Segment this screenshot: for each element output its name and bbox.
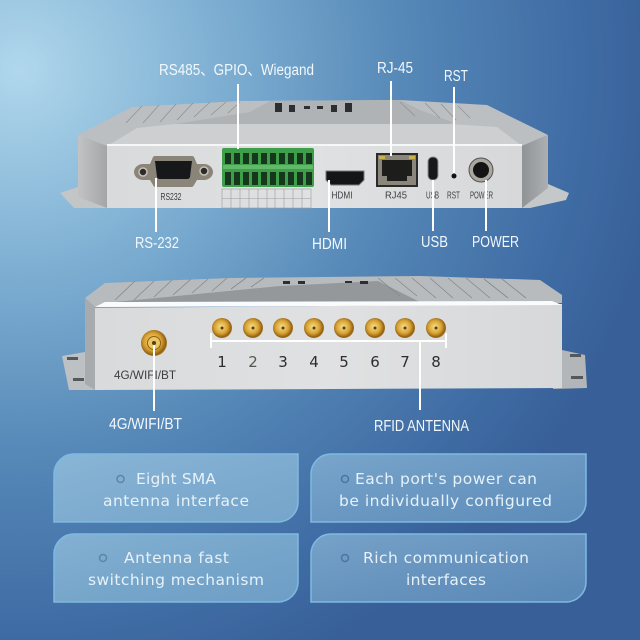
- label: USB: USB: [421, 234, 448, 251]
- antenna numbers: 1: [217, 353, 227, 371]
- antenna numbers: [217, 353, 441, 371]
- port: RJ45: [376, 153, 418, 202]
- card: port power: be individually configured: [339, 492, 552, 510]
- left side panel: [85, 298, 95, 390]
- port: RJ45: RJ45: [385, 190, 407, 202]
- face label: 4G/WIFI/BT: 4G/WIFI/BT: [114, 368, 177, 382]
- antenna numbers: 4: [309, 353, 319, 371]
- antenna connectors 1 to 8: [212, 318, 446, 338]
- label: RFID ANTENNA: RFID ANTENNA: [374, 418, 470, 435]
- device top surface: [85, 276, 562, 307]
- card: fast switching: switching mechanism: [88, 571, 264, 589]
- port: HDMI: [326, 171, 364, 202]
- card: port power: Each port's power can: [355, 470, 537, 488]
- antenna numbers: 3: [278, 353, 288, 371]
- port: USB-C: [426, 157, 439, 202]
- front face: [95, 304, 562, 390]
- port: power jack: POWER: [470, 190, 493, 202]
- left side panel: [78, 135, 107, 208]
- card: rich interfaces: interfaces: [406, 571, 486, 589]
- card: eight SMA: [54, 454, 298, 523]
- port: power jack: [469, 158, 493, 202]
- antenna numbers: 5: [339, 353, 349, 371]
- card: eight SMA: Eight SMA: [136, 470, 216, 488]
- device: top view of port side: [60, 100, 569, 208]
- label: HDMI: HDMI: [312, 236, 347, 253]
- vents: [275, 103, 352, 112]
- pin table: [222, 189, 311, 208]
- card: rich interfaces: Rich communication: [363, 549, 529, 567]
- label: POWER: POWER: [472, 234, 519, 251]
- antenna numbers: 7: [400, 353, 410, 371]
- flanges: [60, 184, 569, 208]
- front face: [107, 146, 522, 208]
- antenna numbers: 8: [431, 353, 441, 371]
- card: rich interfaces: [311, 534, 586, 603]
- card: fast switching: Antenna fast: [124, 549, 229, 567]
- label: 4G/WIFI/BT: 4G/WIFI/BT: [109, 416, 182, 433]
- label: RJ-45: RJ-45: [377, 60, 413, 77]
- label: RS485, GPIO, Wiegand: RS485、GPIO、Wiegand: [159, 62, 314, 79]
- device top surface: [78, 100, 548, 146]
- flanges: [62, 350, 587, 390]
- card: port power: [311, 454, 586, 523]
- right side panel: [522, 135, 548, 208]
- antenna numbers: 2: [248, 353, 258, 371]
- label: RST: RST: [444, 68, 468, 85]
- port: RST pinhole: RST: [447, 190, 460, 202]
- port: RS232 connector: [134, 156, 213, 203]
- port: USB-C: USB: [426, 190, 439, 202]
- card: fast switching: [54, 534, 298, 603]
- card: eight SMA: antenna interface: [103, 492, 249, 510]
- callout lines: [154, 81, 486, 411]
- label: RS-232: RS-232: [135, 235, 179, 252]
- antenna numbers: 6: [370, 353, 380, 371]
- port: RST pinhole: [447, 174, 460, 202]
- SMA connector: 4G: [141, 330, 167, 356]
- device: antenna side: [62, 276, 587, 390]
- port: green terminal block: [222, 148, 314, 187]
- port: RS232 connector: RS232: [160, 191, 182, 203]
- port: HDMI: HDMI: [332, 190, 352, 202]
